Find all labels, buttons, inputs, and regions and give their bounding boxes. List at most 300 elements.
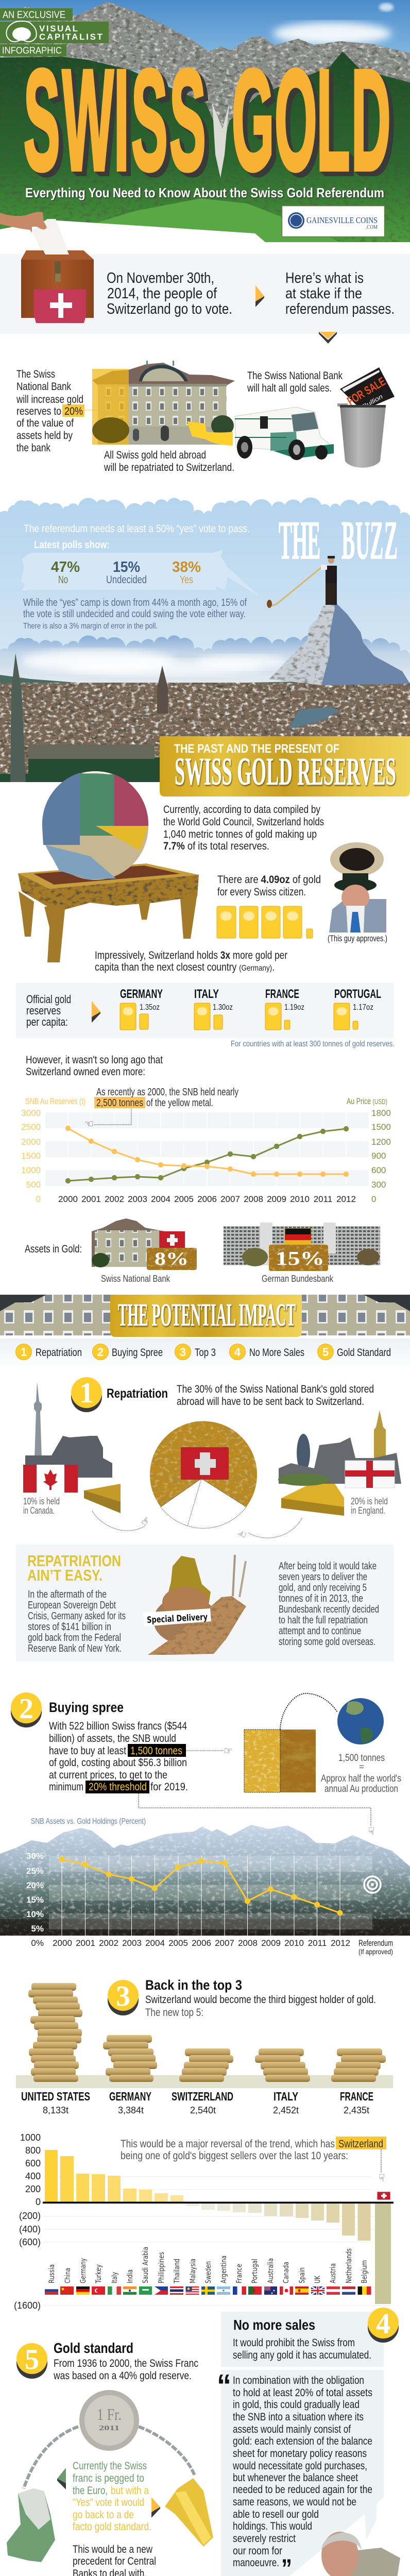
chart: snb assets vs gold over mountains: 0% (31, 1938, 44, 1948)
chart: snb assets vs gold over mountains: 2007 (215, 1938, 234, 1948)
gold pie with swiss flag (150, 1421, 257, 1528)
country labels: Spain (298, 2267, 306, 2283)
truck (235, 407, 334, 460)
line chart: reserves vs price: 2500 (21, 1122, 41, 1132)
country labels: UK (314, 2275, 322, 2283)
panel: official reserves per capita: 1.35oz (140, 1003, 160, 1012)
snail carrying gold (143, 1555, 246, 1655)
line chart: reserves vs price: 2011 (314, 1194, 332, 1204)
quote panel: danthine: our room for (233, 2545, 282, 2557)
text: increase reserves: reserves to (16, 405, 61, 417)
section 2: buying spree text: billion) of assets, the SNB would (49, 1733, 176, 1744)
quote panel: danthine: assets would mainly consist of (233, 2424, 351, 2435)
icon: gold bars row (217, 906, 313, 938)
bar chart: gold buyers and sellers: 200 (25, 2184, 41, 2194)
panel: official reserves per capita (16, 983, 394, 1038)
text: increase reserves: 20% (64, 405, 83, 417)
section 2: buying spree text: minimum (49, 1781, 83, 1793)
chart: snb assets vs gold over mountains (0, 1825, 410, 1956)
line chart: reserves vs price: 500 (26, 1180, 41, 1190)
country labels: Malaysia (189, 2259, 197, 2283)
bar chart: gold buyers and sellers: being one of gold's biggest sellers over the last 10 years: (121, 2150, 348, 2162)
text: half world production (321, 1753, 401, 1794)
panel: official reserves per capita: GERMANY (120, 987, 163, 1001)
labels: canada and england shares: 20% is held (351, 1496, 388, 1506)
text: repatriated: All Swiss gold held abroad (104, 449, 206, 461)
panel: repatriation ain't easy: After being told it would take (279, 1561, 377, 1572)
top 5 labels: SWITZERLAND (172, 2090, 233, 2103)
approving man photo (328, 842, 387, 943)
section 1: repatriation heading: Repatriation (107, 1386, 168, 1401)
country labels: Portugal (251, 2259, 259, 2283)
line chart: reserves vs price: 2006 (197, 1194, 217, 1204)
bar chart: gold buyers and sellers: (200) (19, 2211, 41, 2221)
quote panel: danthine: In combination with the obligation (233, 2375, 364, 2386)
line chart: reserves vs price: 2010 (290, 1194, 310, 1204)
bar chart: gold buyers and sellers: 1000 (20, 2132, 41, 2143)
quote panel: danthine: but whenever the balance sheet (233, 2472, 358, 2484)
assets: german bundesbank 15 percent: German Bundesbank (262, 1274, 334, 1284)
nav band: Gold Standard (337, 1347, 391, 1359)
coin stack: united states (28, 1983, 82, 2082)
quote panel: danthine: in gold, this could gradually lead (233, 2399, 360, 2411)
section 3: back in the top 3: The new top 5: (145, 2007, 203, 2019)
line chart: reserves vs price: 0 (371, 1194, 376, 1204)
badge: an exclusive visual capitalist infographic: AN EXCLUSIVE (3, 10, 65, 21)
labels: canada and england shares: in Canada. (23, 1505, 55, 1516)
logo box: gainesville coins: .COM (366, 225, 378, 230)
country labels: Australia (267, 2258, 275, 2283)
country labels: Germany (79, 2258, 88, 2283)
section 2: buying spree text: With 522 billion Swiss francs ($544 (49, 1720, 187, 1732)
london skyline and flag (278, 1410, 401, 1488)
top 5 labels: FRANCE (340, 2090, 373, 2103)
text: referendum needs 50 percent: The referendum needs at least a 50% “yes” vote to pass. (24, 523, 250, 535)
line chart: reserves vs price: of the yellow metal. (146, 1097, 213, 1109)
gold block split (244, 1730, 316, 1792)
text: increase reserves: assets held by (16, 430, 73, 442)
chart: snb assets vs gold over mountains: 2010 (284, 1938, 304, 1948)
arrow: tonnes to gold bar: ☞ (224, 1744, 233, 1757)
text: referendum needs 50 percent: Latest polls show: (34, 539, 110, 551)
text: current reserves: 1,040 metric tonnes of gold making up (163, 828, 317, 840)
panel: repatriation ain't easy: attempt and to continue (279, 1625, 361, 1637)
quote panel: danthine: needed to be reduced again for the (233, 2484, 372, 2496)
country labels: Italy (111, 2272, 119, 2283)
table with pie chart (18, 771, 199, 962)
nav band: 5 (322, 1346, 329, 1359)
chart: snb assets vs gold over mountains: (If approved) (358, 1947, 393, 1956)
panel: official reserves per capita: 1.19oz (284, 1003, 304, 1012)
section 4: no more sales: selling any gold it has accumulated. (233, 2349, 371, 2361)
arrows: dotted return arcs: ☞ (235, 1527, 249, 1541)
white torn paper edge (0, 220, 410, 254)
coin stack: italy (255, 2048, 310, 2082)
country labels: Austria (329, 2263, 337, 2283)
text: current reserves: Currently, according to data compiled by (163, 804, 320, 816)
text: currently pegged (57, 2460, 160, 2576)
nav band: 4 (234, 1346, 241, 1359)
arrow: tonnes to gold bar (186, 1744, 233, 1757)
chart: snb assets vs gold over mountains: 2005 (168, 1938, 188, 1948)
chart: snb assets vs gold over mountains: 15% (26, 1895, 44, 1905)
text: currently pegged: "Yes" vote it would (73, 2497, 144, 2509)
quote panel: danthine (217, 2368, 384, 2576)
country labels: Canada (282, 2262, 291, 2283)
intro text (107, 270, 232, 317)
labels: canada and england shares: in England. (351, 1505, 385, 1516)
city skyline photo (0, 653, 410, 782)
text: current reserves: 7.7% of its total reserves. (163, 840, 269, 852)
intro band (0, 254, 410, 334)
arrow: yellow curved (187, 421, 233, 446)
text: increase reserves (16, 368, 99, 454)
section 3: back in the top 3: 3 (116, 1980, 130, 2012)
country labels: India (126, 2269, 134, 2283)
text: increase reserves: of the value of (16, 417, 74, 429)
section 2: buying spree text: 20% threshold (89, 1781, 147, 1793)
chart: snb assets vs gold over mountains: 2009 (261, 1938, 281, 1948)
text: poll context: the vote is still undecided and could swing the vote either way. (23, 608, 246, 620)
text: owned even more: Switzerland owned even more: (26, 1066, 145, 1078)
portrait: jean-pierre danthine (296, 2532, 400, 2576)
panel: repatriation ain't easy: Bundesbank recently decided (279, 1604, 379, 1615)
section 5: gold standard: 5 (25, 2344, 39, 2376)
text: ounces per citizen: There are 4.09oz of gold (217, 874, 321, 886)
quote panel: danthine: severely restrict (233, 2533, 296, 2545)
chart: snb assets vs gold over mountains: 30% (26, 1851, 44, 1861)
chart: snb assets vs gold over mountains: 2006 (192, 1938, 211, 1948)
bar chart: gold buyers and sellers: 400 (25, 2171, 41, 2181)
arrow: threshold to referendum target: ☞ (365, 1826, 378, 1836)
arrow: right chevron (255, 285, 264, 307)
chart: snb assets vs gold over mountains: 2002 (99, 1938, 118, 1948)
hand holding ballot (0, 212, 69, 254)
text: half world production: = (359, 1762, 364, 1772)
text: increase reserves: The Swiss (16, 368, 55, 380)
nav band (0, 1338, 410, 1369)
chain, coin, euros and gold bars: 2011 (99, 2425, 119, 2432)
callout: poll speech bubble: 38% (172, 559, 201, 575)
intro text: On November 30th, (107, 270, 214, 286)
line chart: reserves vs price: 2007 (220, 1194, 240, 1204)
text: halt gold sales: The Swiss National Bank (247, 370, 343, 382)
chart: snb assets vs gold over mountains: 2004 (145, 1938, 165, 1948)
country labels: Sweden (204, 2261, 213, 2283)
text: ounces per citizen (217, 874, 321, 898)
quote panel: danthine: “ (217, 2368, 231, 2404)
section 1: repatriation heading: The 30% of the Swiss National Bank's gold stored (177, 1383, 374, 1395)
section 3: back in the top 3: Back in the top 3 (145, 1977, 242, 1993)
chart: snb assets vs gold over mountains: 2011 (308, 1938, 327, 1948)
text: currently pegged: precedent for Central (73, 2555, 156, 2567)
callout: poll speech bubble (21, 550, 259, 596)
line chart: reserves vs price: 2000 (21, 1137, 41, 1147)
chart: snb assets vs gold over mountains: 10% (26, 1909, 44, 1919)
section 2: buying spree text: 1,500 tonnes (130, 1745, 182, 1757)
panel: official reserves per capita: Official gold (26, 993, 71, 1006)
line chart: reserves vs price: SNB Au Reserves (t) (25, 1096, 86, 1106)
line chart: reserves vs price: 2000 (58, 1194, 78, 1204)
line chart: reserves vs price: 2008 (244, 1194, 263, 1204)
text: currently pegged: Currently the Swiss (73, 2460, 147, 2472)
trash can with for sale sign: Bullion (361, 393, 384, 411)
callout: poll speech bubble: 47% (51, 559, 80, 575)
panel: repatriation ain't easy: In the aftermath of the (28, 1589, 107, 1600)
stake text: Here’s what is (285, 270, 364, 286)
line chart: reserves vs price: 2,500 tonnes (96, 1097, 143, 1109)
section 5: gold standard: From 1936 to 2000, the Swiss Franc (54, 2358, 198, 2369)
country labels: Turkey (95, 2264, 103, 2284)
line chart: reserves vs price: 1200 (371, 1137, 391, 1147)
icon: ballot box (21, 247, 94, 323)
assets: german bundesbank 15 percent (224, 1223, 380, 1284)
chain, coin, euros and gold bars: 1 Fr. (97, 2405, 122, 2424)
text: current reserves (163, 804, 324, 852)
section 2: buying spree text: have to buy at least (49, 1745, 126, 1757)
arrows: dotted return arcs (92, 1511, 302, 1541)
top 5 labels: 2,540t (190, 2105, 216, 2115)
coin stack: germany (103, 2035, 157, 2082)
line chart: reserves vs price: 1500 (21, 1151, 41, 1161)
panel: repatriation ain't easy (16, 1545, 394, 1662)
text: currently pegged: go back to a de (73, 2509, 134, 2521)
chart: snb assets vs gold over mountains: 2012 (331, 1938, 350, 1948)
section 4: no more sales: No more sales (233, 2317, 315, 2333)
country flags row (45, 2286, 371, 2295)
country labels: Philippines (158, 2252, 166, 2283)
line chart: reserves vs price: 1800 (371, 1108, 391, 1118)
line chart: reserves vs price: 1500 (371, 1122, 391, 1132)
line chart: reserves vs price: ☞ (84, 1117, 94, 1130)
text: poll context: There is also a 3% margin of error in the poll. (23, 622, 158, 631)
panel: repatriation ain't easy: AIN’T EASY. (27, 1566, 102, 1584)
badge: an exclusive visual capitalist infographic: VISUAL (39, 24, 78, 33)
section 4: no more sales (221, 2308, 399, 2367)
assets: swiss national bank 8 percent: 8% (155, 1248, 189, 1269)
chain, coin, euros and gold bars (7, 2390, 213, 2562)
earth globe (280, 1693, 384, 1744)
chart: snb assets vs gold over mountains: 5% (31, 1924, 44, 1934)
section 3: back in the top 3 (108, 1977, 376, 2019)
text: referendum needs 50 percent (24, 523, 250, 551)
text: repatriated: will be repatriated to Switzerland. (104, 462, 234, 473)
chart: snb assets vs gold over mountains: 25% (26, 1866, 44, 1876)
line chart: reserves vs price: Au Price (USD) (347, 1096, 387, 1106)
panel: repatriation ain't easy: European Sovereign Debt (28, 1600, 116, 1611)
arrow: threshold to referendum target (139, 1793, 378, 1836)
line chart: reserves vs price: 2004 (151, 1194, 170, 1204)
arrow: down chevron (319, 332, 337, 344)
panel: repatriation ain't easy: tonnes of it in 2013, the (279, 1593, 363, 1604)
shelf (16, 2075, 393, 2088)
text: increase reserves: the bank (16, 442, 50, 454)
nav band: Repatriation (36, 1347, 82, 1359)
callout: poll speech bubble: 15% (113, 559, 140, 575)
panel: repatriation ain't easy: storing some gold overseas. (279, 1636, 375, 1648)
badge: an exclusive visual capitalist infographic: CAPITALIST (39, 32, 103, 42)
callout: poll speech bubble: Undecided (106, 574, 147, 586)
top 5 labels: ITALY (274, 2090, 298, 2103)
gold pie piece: england (281, 1480, 344, 1516)
text: ounces per citizen: for every Swiss citizen. (217, 886, 306, 898)
text: currently pegged: This would be a new (73, 2544, 153, 2555)
nav band: 1 (21, 1346, 27, 1359)
line chart: reserves vs price: 2001 (81, 1194, 101, 1204)
text: halt gold sales: will halt all gold sales. (247, 382, 332, 394)
top 5 labels: UNITED STATES (21, 2090, 90, 2103)
snail carrying gold: Special Delivery (147, 1612, 208, 1625)
section 2: buying spree text: for 2019. (150, 1781, 188, 1793)
country labels: Netherlands (345, 2248, 353, 2283)
nav band: No More Sales (249, 1347, 304, 1359)
panel: repatriation ain't easy: stores of $141 billion in (28, 1621, 111, 1633)
assets: swiss national bank 8 percent (92, 1218, 197, 1284)
intro text: 2014, the people of (107, 285, 217, 302)
logo box: gainesville coins: GAINESVILLE COINS (306, 215, 378, 225)
nav band: 2 (97, 1346, 104, 1359)
quote panel: danthine: sheet for monetary policy reasons (233, 2448, 367, 2460)
line chart: reserves vs price: 2012 (336, 1194, 356, 1204)
section 5: gold standard: was based on a 40% gold reserve. (53, 2370, 192, 2382)
arrows: dotted return arcs: ☞ (138, 1514, 153, 1529)
top 5 labels: 2,435t (344, 2105, 369, 2115)
text: assets in gold: Assets in Gold: (25, 1243, 82, 1255)
quote panel: danthine: to hold at least 20% of total assets (233, 2387, 372, 2399)
top 5 labels: 8,133t (43, 2105, 69, 2115)
line chart: reserves vs price: 2003 (128, 1194, 147, 1204)
text: per capita (95, 950, 287, 973)
text: half world production: 1,500 tonnes (338, 1753, 385, 1764)
logo box: gainesville coins (282, 206, 384, 237)
bar chart: gold buyers and sellers: ☞ (375, 2173, 388, 2182)
quote panel: danthine: would necessitate gold purchases, (232, 2460, 367, 2472)
country labels: Thailand (173, 2259, 181, 2284)
text: currently pegged: facto gold standard. (73, 2521, 151, 2533)
chart: snb assets vs gold over mountains: Referendum (358, 1938, 393, 1948)
top 5 labels (21, 2090, 373, 2115)
approving man photo: (This guy approves.) (328, 934, 387, 943)
text: current reserves: the World Gold Council, Switzerland holds (163, 816, 324, 828)
text: currently pegged: but with a (111, 2485, 149, 2497)
panel: official reserves per capita: 1.17oz (353, 1003, 373, 1012)
section 1: repatriation heading (71, 1377, 374, 1412)
panel: repatriation ain't easy: Reserve Bank of New York. (28, 1643, 122, 1654)
line chart: reserves vs price: 300 (371, 1180, 386, 1190)
section 5: gold standard (16, 2340, 198, 2382)
bar chart: gold buyers and sellers (14, 2132, 394, 2311)
bar chart: gold buyers and sellers: (400) (19, 2224, 41, 2234)
bar chart: gold buyers and sellers: This would be a major reversal of the trend, which has (121, 2138, 335, 2150)
chart: snb assets vs gold over mountains: 2003 (122, 1938, 142, 1948)
chart title: SNB Assets vs. Gold Holdings (Percent) (31, 1817, 146, 1826)
line chart: reserves vs price: 3000 (21, 1108, 41, 1118)
line chart: reserves vs price: 600 (371, 1165, 386, 1175)
panel: repatriation ain't easy: REPATRIATION (27, 1552, 121, 1570)
quote panel: danthine: same reasons, we would not be (233, 2496, 356, 2508)
country labels: Belgium (361, 2260, 369, 2283)
section 4: no more sales: 4 (376, 2308, 390, 2340)
nav band: Top 3 (195, 1347, 216, 1359)
panel: the buzz sky (0, 498, 410, 686)
text: currently pegged: franc is pegged to (73, 2472, 144, 2484)
building: swiss national bank (92, 361, 235, 445)
line chart: reserves vs price: 900 (371, 1151, 386, 1161)
panel: repatriation ain't easy: to halt the full repatriation (279, 1615, 368, 1626)
panel: official reserves per capita: per capita: (26, 1015, 68, 1028)
line chart: reserves vs price (21, 1087, 391, 1204)
top 5 labels: GERMANY (109, 2090, 151, 2103)
bar chart: gold buyers and sellers: 600 (25, 2158, 41, 2168)
assets: german bundesbank 15 percent: 15% (276, 1248, 324, 1269)
panel: official reserves per capita: FRANCE (265, 987, 299, 1001)
panel: official reserves per capita: ITALY (194, 987, 219, 1001)
text: per capita: Impressively, Switzerland holds 3x more gold per (95, 950, 287, 961)
text: increase reserves: will increase gold (16, 394, 83, 405)
top 5 labels: 3,384t (118, 2105, 144, 2115)
section 2: buying spree text: of gold, costing about $56.3 billion (49, 1757, 187, 1769)
section 2: buying spree text: 2 (19, 1693, 33, 1725)
country labels (48, 2247, 369, 2284)
line chart: reserves vs price: 2009 (267, 1194, 286, 1204)
callout: poll speech bubble: Yes (180, 574, 193, 586)
section 2: buying spree text (11, 1692, 188, 1793)
bar chart: gold buyers and sellers: 800 (25, 2145, 41, 2156)
top 5 labels: 2,452t (273, 2105, 299, 2115)
panel: repatriation ain't easy: gold back from the Federal (28, 1632, 121, 1643)
heading: the buzz: THE BUZZ (279, 511, 398, 571)
heading banner: the potential impact (0, 1295, 410, 1337)
title: swiss gold: SWISS GOLD (24, 40, 390, 200)
panel: official reserves per capita: reserves (26, 1004, 61, 1017)
coin stack: switzerland (179, 2048, 233, 2082)
heading banner: past and present: THE PAST AND THE PRESENT OF (174, 742, 339, 756)
bar chart: gold buyers and sellers: 0 (36, 2197, 41, 2207)
line chart: reserves vs price: 2005 (174, 1194, 194, 1204)
bar chart: gold buyers and sellers: (600) (19, 2237, 41, 2247)
line chart: reserves vs price: 1000 (21, 1165, 41, 1175)
text: poll context: While the “yes” camp is down from 44% a month ago, 15% of (23, 597, 247, 608)
country labels: Saudi Arabia (142, 2247, 150, 2283)
panel: repatriation ain't easy: Crisis, Germany asked for its (28, 1611, 126, 1622)
quote panel: danthine: able to resell our gold (233, 2509, 319, 2520)
callout: poll speech bubble: No (58, 574, 68, 586)
coin stack: france (331, 2048, 386, 2082)
badge: an exclusive visual capitalist infographic: INFOGRAPHIC (2, 45, 62, 56)
quote panel: danthine: the SNB into a situation where its (233, 2411, 364, 2423)
line chart: reserves vs price: 0 (36, 1194, 41, 1204)
quote panel: danthine: manoeuvre. (233, 2557, 279, 2569)
section 4: no more sales: It would prohibit the Swiss from (233, 2337, 355, 2349)
line chart: reserves vs price: 2002 (105, 1194, 124, 1204)
section 1: repatriation heading: abroad will have to be sent back to Switzerland. (177, 1396, 364, 1408)
bar chart: gold buyers and sellers: Switzerland (338, 2138, 383, 2150)
panel: official reserves per capita: PORTUGAL (334, 987, 381, 1001)
text: per capita: capita than the next closest country (Germany). (95, 961, 275, 973)
country labels: China (64, 2268, 72, 2283)
badge: an exclusive visual capitalist infographic (0, 8, 109, 56)
panel: official reserves per capita: 1.30oz (213, 1003, 233, 1012)
line chart: reserves vs price: As recently as 2000, the SNB held nearly (96, 1087, 238, 1098)
section 5: gold standard: Gold standard (54, 2340, 133, 2356)
assets: swiss national bank 8 percent: Swiss National Bank (101, 1274, 170, 1284)
heading banner: past and present (160, 736, 410, 796)
section 2: buying spree text: Buying spree (49, 1700, 124, 1715)
quote panel: danthine: holdings. This would (233, 2520, 312, 2532)
alphorn player on matterhorn (267, 556, 410, 685)
hero photo background (0, 0, 410, 242)
section 2: buying spree text: at current prices, to get to the (49, 1769, 167, 1781)
